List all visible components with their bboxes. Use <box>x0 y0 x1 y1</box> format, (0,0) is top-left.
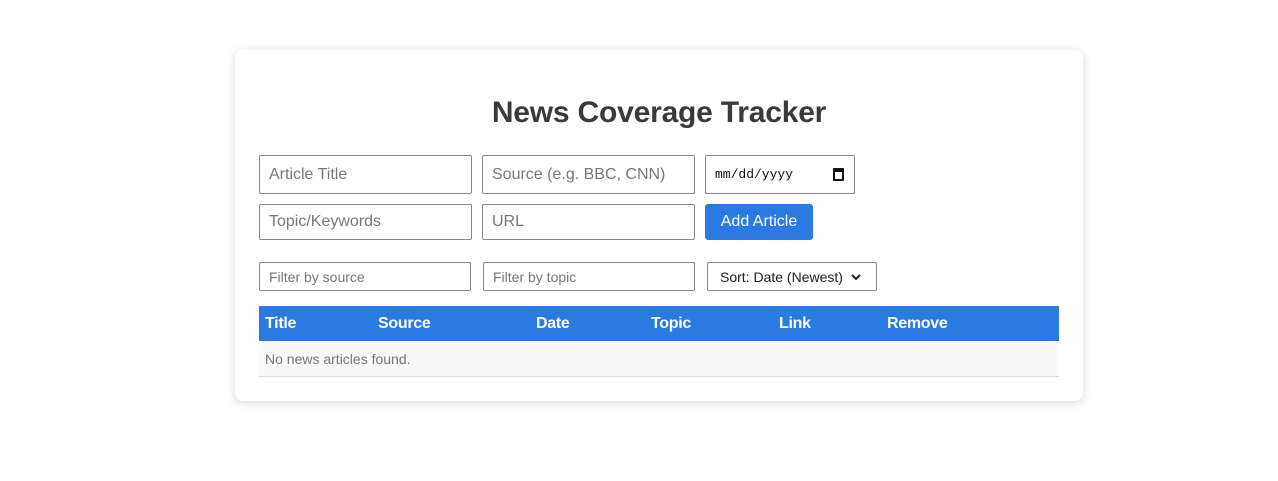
filter: topic <box>483 262 695 291</box>
input: source <box>482 155 695 194</box>
filter: source <box>259 262 471 291</box>
filter: source: Filter by source <box>269 268 365 284</box>
select: sort: Sort: Date (Newest) <box>720 268 843 284</box>
input: source: Source (e.g. BBC, CNN) <box>492 166 665 182</box>
table header: Link <box>779 315 811 332</box>
input: url <box>482 204 695 240</box>
table header: Topic <box>651 315 691 332</box>
input: article title <box>259 155 472 194</box>
table header: Title <box>265 315 296 332</box>
select: sort <box>707 262 877 291</box>
table header <box>259 306 1059 341</box>
input: date: mm/dd/yyyy <box>715 167 793 182</box>
filter: topic: Filter by topic <box>493 268 576 284</box>
table header: Date <box>536 315 569 332</box>
table header: Source <box>378 315 430 332</box>
table row: empty message <box>259 341 1059 377</box>
input: topic <box>259 204 472 240</box>
input: topic: Topic/Keywords <box>269 213 381 230</box>
table row: empty message: No news articles found. <box>265 351 411 367</box>
input: url: URL <box>492 213 524 230</box>
input: article title: Article Title <box>269 166 347 182</box>
panel: tracker card <box>235 50 1083 401</box>
button: add article <box>705 204 813 240</box>
table header: Remove <box>887 315 947 332</box>
button: add article: Add Article <box>721 213 797 230</box>
input: date <box>705 155 855 194</box>
title: News Coverage Tracker <box>492 96 826 129</box>
